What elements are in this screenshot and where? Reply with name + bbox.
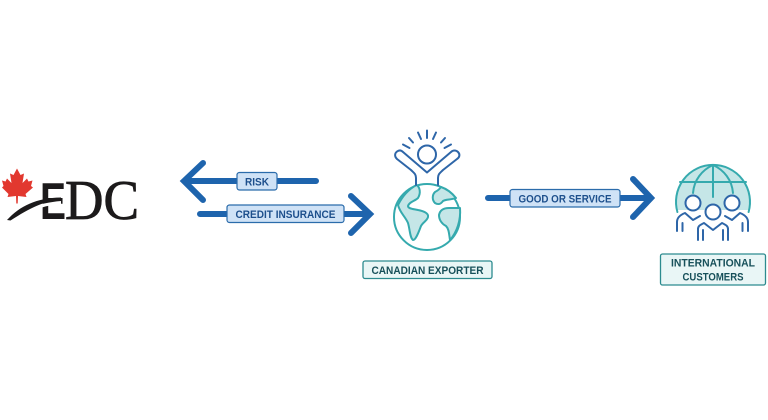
icon: maple leaf	[2, 168, 33, 204]
label: risk: RISK	[245, 176, 269, 188]
label: canadian exporter: CANADIAN EXPORTER	[372, 265, 484, 277]
customer right	[724, 196, 748, 231]
logo wordmark: DC	[65, 170, 139, 232]
rays	[403, 130, 451, 148]
logo wordmark: E	[40, 173, 66, 231]
label: credit insurance	[227, 205, 344, 222]
label: international customers: CUSTOMERS	[682, 271, 744, 283]
icon: globe with customers	[676, 164, 750, 240]
arrow: credit insurance	[200, 196, 370, 233]
label: international customers: INTERNATIONAL	[671, 257, 755, 269]
label: international customers	[660, 254, 766, 285]
label: good or service	[510, 190, 620, 207]
globe dome	[676, 164, 750, 212]
logo swoosh	[7, 201, 61, 223]
logo: EDC	[2, 168, 139, 232]
arrow: risk	[184, 163, 316, 200]
globe	[394, 184, 460, 250]
label: good or service: GOOD OR SERVICE	[518, 193, 612, 205]
person	[395, 130, 459, 185]
customer middle	[698, 204, 728, 240]
customers	[677, 196, 748, 240]
arrow: good or service	[488, 179, 651, 217]
icon: person on globe	[394, 130, 460, 250]
customer left	[677, 196, 701, 231]
continents	[398, 185, 428, 240]
label: credit insurance: CREDIT INSURANCE	[236, 209, 336, 221]
label: canadian exporter	[363, 261, 492, 278]
